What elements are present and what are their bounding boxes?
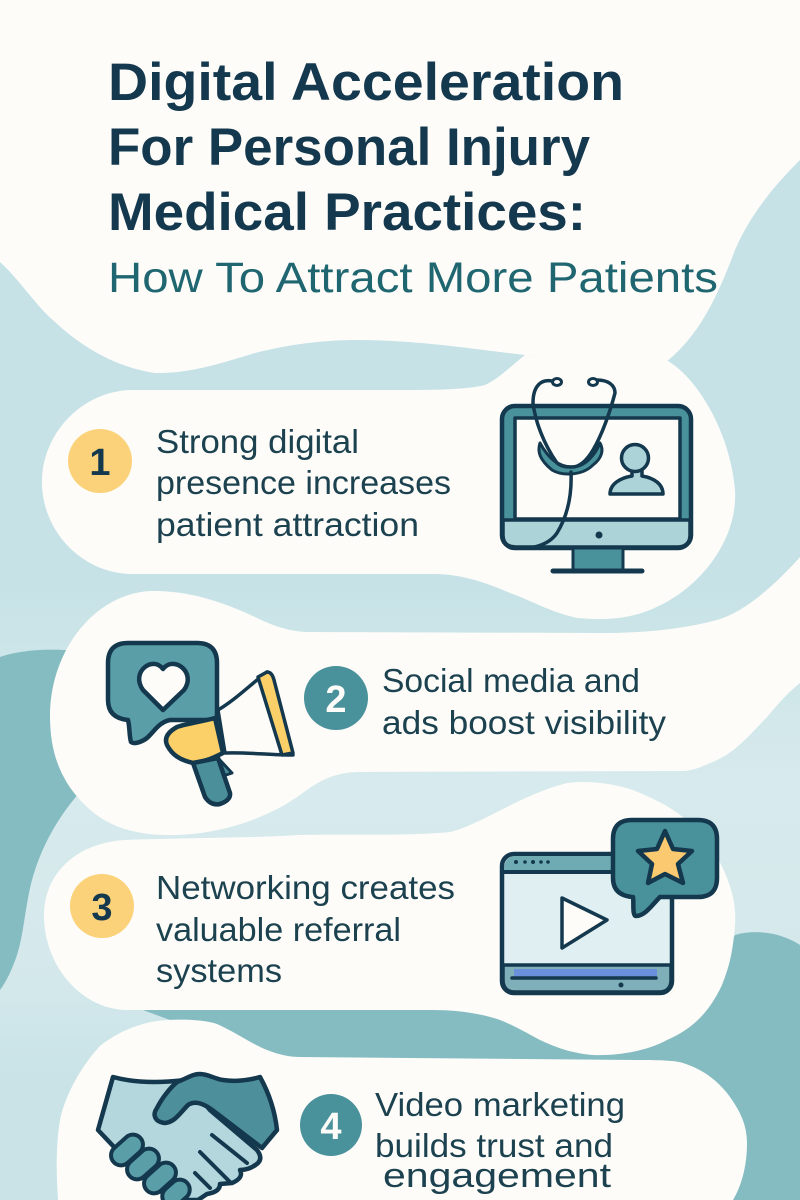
text: item 3: valuable referral [156,911,401,948]
title: Digital Acceleration [108,53,624,112]
text: item 2: ads boost visibility [382,704,667,741]
text: item 4: builds trust and [375,1127,613,1164]
badge 4 [300,1094,362,1156]
title: For Personal Injury [108,118,591,177]
icon: video window with star bubble [502,820,717,993]
text: item 2 [382,662,667,741]
title: Medical Practices: [108,183,586,242]
badge 1 [68,429,132,493]
icon: megaphone with heart bubble [108,643,293,804]
badge 2 [304,666,368,730]
text: item 1: Strong digital [156,423,359,460]
badge 3: 3 [91,887,113,929]
panel: item 3 [44,782,735,1055]
text: item 1: patient attraction [156,506,419,543]
panel: item 2 [50,557,800,835]
icon: monitor with stethoscope [502,378,691,571]
icon: handshake [98,1074,277,1200]
text: item 4: Video marketing [375,1086,625,1123]
text: item 3 [156,869,455,989]
subtitle: How To Attract More Patients [108,254,718,302]
badge 2: 2 [325,679,347,721]
text: item 4 [375,1086,625,1195]
badge 3 [70,874,134,938]
text: item 1: presence increases [156,464,451,501]
badge 1: 1 [89,442,111,484]
panel: item 4 [57,1020,747,1200]
text: item 3: systems [156,952,282,989]
title [108,53,624,242]
text: item 3: Networking creates [156,869,455,906]
panel: item 1 [42,355,735,619]
badge 4: 4 [320,1106,342,1148]
text: item 4: engagement [383,1157,612,1195]
text: item 2: Social media and [382,662,640,699]
text: item 1 [156,423,451,543]
